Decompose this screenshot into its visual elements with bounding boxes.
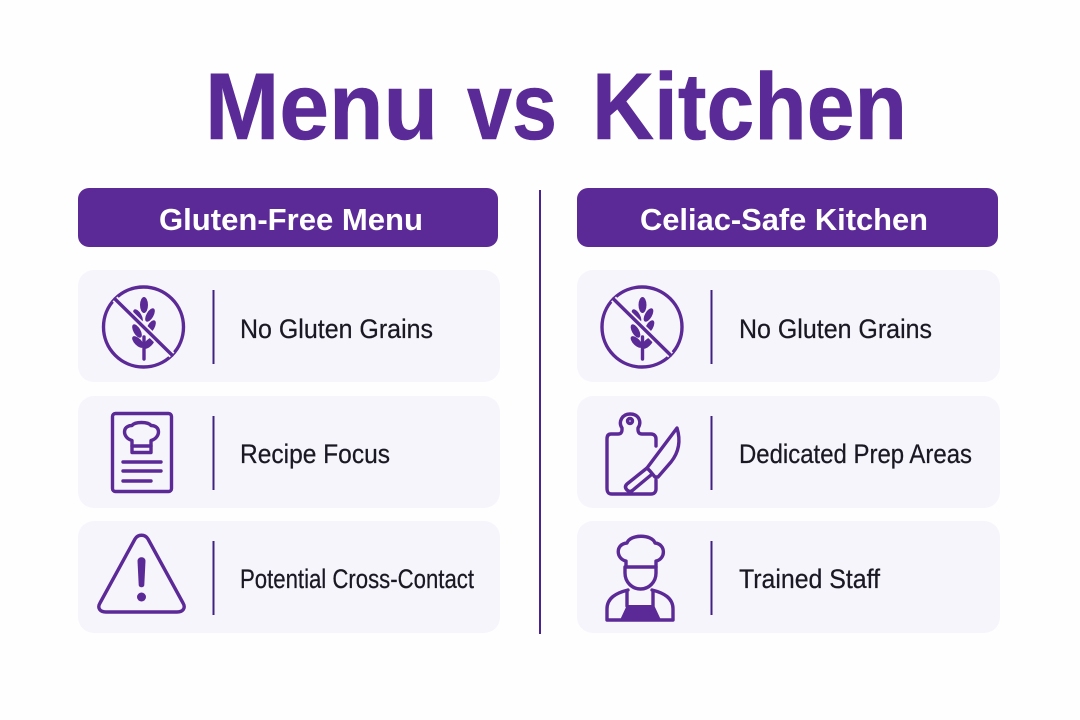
title: Menu: [205, 54, 438, 160]
title: vs: [467, 54, 557, 160]
row: no gluten grains: [78, 270, 500, 382]
row: trained staff: [577, 521, 1000, 633]
icon: cutting board and knife: [607, 414, 679, 494]
icon: crossed-out wheat: [104, 287, 184, 367]
icon: chef: [607, 536, 673, 620]
label: Potential Cross-Contact: [240, 564, 474, 594]
title: [205, 54, 907, 160]
label: Recipe Focus: [240, 439, 390, 469]
row: dedicated prep areas: [577, 396, 1000, 508]
title: Kitchen: [592, 54, 907, 160]
row: recipe focus: [78, 396, 500, 508]
icon: recipe card with chef hat: [112, 414, 172, 492]
center divider: [539, 190, 541, 634]
panel: gluten-free menu: [78, 188, 500, 633]
label: No Gluten Grains: [240, 314, 433, 344]
row: potential cross-contact: [78, 521, 500, 633]
panel: celiac-safe kitchen: [577, 188, 1000, 633]
header: Gluten-Free Menu: Gluten-Free Menu: [159, 202, 423, 237]
header: Celiac-Safe Kitchen: [577, 188, 998, 247]
icon: warning triangle: [99, 535, 184, 612]
icon: crossed-out wheat: [602, 287, 682, 367]
label: No Gluten Grains: [739, 314, 932, 344]
header: Celiac-Safe Kitchen: Celiac-Safe Kitchen: [640, 202, 928, 237]
header: Gluten-Free Menu: [78, 188, 498, 247]
label: Dedicated Prep Areas: [739, 439, 972, 469]
label: Trained Staff: [739, 564, 880, 594]
row: no gluten grains: [577, 270, 1000, 382]
